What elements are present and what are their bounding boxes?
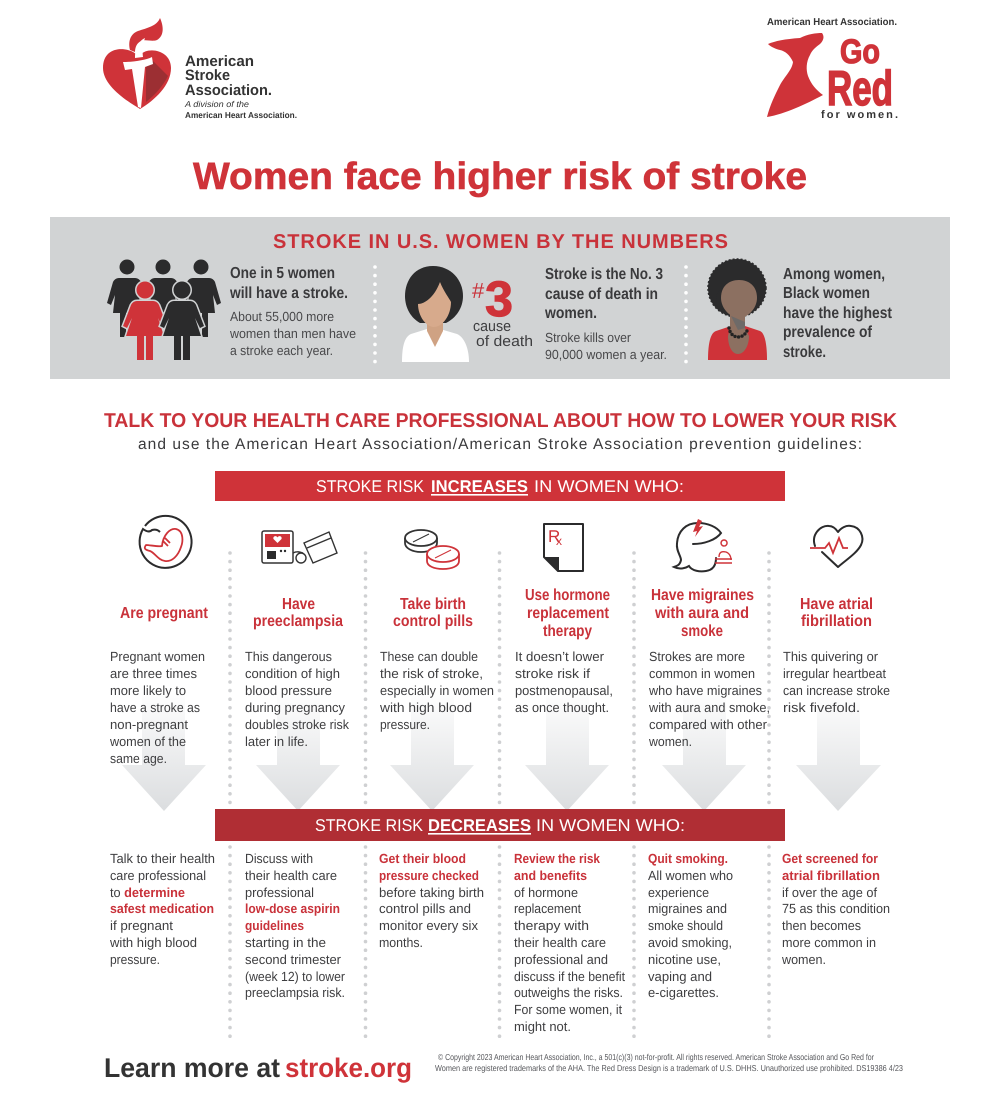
advice: migraines and smoke: migraines and <box>648 901 727 916</box>
advice: birth control pills <box>379 851 484 950</box>
advice: preeclampsia <box>245 851 346 1000</box>
stat: one in 5 women: will have a stroke. <box>229 285 348 302</box>
advice: atrial fibrillation: then becomes <box>782 918 861 933</box>
body text: as once thought. <box>515 700 609 715</box>
footer call to action: stroke.org <box>285 1053 412 1083</box>
stat: one in 5 women: One in 5 women <box>230 265 335 282</box>
body text: non-pregnant <box>110 717 188 732</box>
advice: hormone replacement therapy: For some women, it <box>514 1002 622 1017</box>
body text: It doesn’t lower <box>515 649 605 664</box>
heading <box>800 596 873 630</box>
body text <box>783 649 890 715</box>
heading <box>393 596 473 630</box>
stat: Black women prevalence: Black women <box>783 285 870 302</box>
advice: preeclampsia: Discuss with <box>245 851 313 866</box>
advice: pregnant: pressure. <box>110 952 160 967</box>
column: birth control pills <box>379 530 494 811</box>
callout: #3 cause of death: 3 <box>485 271 513 327</box>
logo: American Stroke Association: Stroke <box>185 67 230 84</box>
column: migraines and smoke <box>648 519 770 811</box>
advice: migraines and smoke: Quit smoking. <box>648 851 728 866</box>
arrow <box>525 690 609 811</box>
heading: Have migraines <box>651 587 754 604</box>
callout: #3 cause of death: # <box>472 278 485 303</box>
heading <box>525 587 610 640</box>
advice: migraines and smoke: experience <box>648 885 709 900</box>
advice: birth control pills: months. <box>379 935 423 950</box>
advice: migraines and smoke: smoke should <box>648 918 723 933</box>
advice: atrial fibrillation: Get screened for <box>782 851 878 866</box>
stat: No. 3 cause of death: Stroke kills over <box>545 330 632 345</box>
logo: Go Red for Women: Red <box>827 62 893 116</box>
advice: preeclampsia: second trimester <box>245 952 342 967</box>
heading: Are pregnant <box>120 605 209 622</box>
callout: #3 cause of death <box>472 271 533 350</box>
icon: group of women <box>107 260 221 360</box>
body text: women of the <box>109 734 186 749</box>
stat: Black women prevalence: stroke. <box>783 344 826 361</box>
banner: risk decreases: DECREASES <box>428 816 531 835</box>
heading: preeclampsia <box>253 613 343 630</box>
logo: American Stroke Association: American Heart Association. <box>185 110 297 120</box>
advice: preeclampsia: professional <box>245 885 314 900</box>
logo: Go Red for Women: for women. <box>821 109 898 121</box>
icon: pills <box>405 530 459 569</box>
section heading: TALK TO YOUR HEALTH CARE PROFESSIONAL ABOUT HOW TO LOWER YOUR RISK <box>104 410 898 432</box>
column: pregnant <box>109 516 209 811</box>
arrow <box>256 690 340 811</box>
banner: risk increases: INCREASES <box>431 477 528 496</box>
stat: one in 5 women <box>229 265 356 358</box>
panel heading: STROKE IN U.S. WOMEN BY THE NUMBERS <box>273 231 728 253</box>
banner: risk decreases <box>215 809 785 841</box>
heading <box>651 587 754 640</box>
advice: pregnant: Talk to their health <box>110 851 215 866</box>
advice: pregnant: care professional <box>110 868 206 883</box>
body text <box>379 649 494 732</box>
body text: later in life. <box>245 734 308 749</box>
icon: woman with dark hair <box>402 266 469 362</box>
body text <box>109 649 205 766</box>
body text: This quivering or <box>783 649 879 664</box>
body text: condition of high <box>245 666 340 681</box>
advice: preeclampsia: guidelines <box>245 918 304 933</box>
stat: Black women prevalence <box>783 266 893 361</box>
body text: stroke risk if <box>515 666 590 681</box>
icon: migraine head and smoking <box>674 519 732 571</box>
stat: No. 3 cause of death: Stroke is the No. 3 <box>545 266 663 283</box>
heading: Take birth <box>400 596 466 613</box>
footer call to action <box>104 1053 412 1083</box>
heading: control pills <box>393 613 473 630</box>
copyright text: Women are registered trademarks of the AHA. The Red Dress Design is a trademark of U.S. DHHS. Unauthorized use prohibited. DS19386 4/23 <box>435 1063 903 1073</box>
advice: birth control pills: Get their blood <box>379 851 466 866</box>
banner: risk decreases: STROKE RISK <box>315 816 424 835</box>
advice: preeclampsia: their health care <box>245 868 337 883</box>
icon: red dress <box>767 33 823 117</box>
column: atrial fibrillation <box>783 526 890 811</box>
body text: doubles stroke risk <box>245 717 349 732</box>
body text: pressure. <box>380 717 430 732</box>
copyright text <box>435 1052 903 1073</box>
advice: atrial fibrillation: if over the age of <box>782 885 877 900</box>
stat: No. 3 cause of death: 90,000 women a year. <box>545 347 667 362</box>
advice: atrial fibrillation <box>781 851 890 967</box>
banner: risk increases <box>215 471 785 501</box>
body text: with high blood <box>379 700 472 715</box>
advice: atrial fibrillation: atrial fibrillation <box>782 868 880 883</box>
heading: fibrillation <box>801 613 872 630</box>
advice: hormone replacement therapy: of hormone <box>514 885 578 900</box>
advice: atrial fibrillation: more common in <box>782 935 876 950</box>
body text: compared with other <box>649 717 768 732</box>
panel: stroke by the numbers <box>50 217 950 379</box>
icon: prescription page: R <box>548 527 560 546</box>
column: hormone replacement therapy <box>515 524 613 811</box>
callout: #3 cause of death: cause <box>473 318 511 335</box>
heading <box>253 596 343 630</box>
icon: blood pressure monitor <box>262 531 337 563</box>
stat: Black women prevalence: have the highest <box>783 305 893 322</box>
advice: hormone replacement therapy: therapy with <box>514 918 589 933</box>
advice: migraines and smoke <box>648 851 733 1000</box>
logo: Go Red for Women <box>767 17 898 121</box>
icon: fetus <box>140 516 192 568</box>
advice: preeclampsia: (week 12) to lower <box>245 969 346 984</box>
advice: hormone replacement therapy: replacement <box>514 901 581 916</box>
advice: hormone replacement therapy: professional and <box>514 952 608 967</box>
icon: heart with ECG line <box>810 526 862 567</box>
title: Women face higher risk of stroke <box>193 156 807 198</box>
body text: risk fivefold. <box>783 700 860 715</box>
body text: Pregnant women <box>110 649 205 664</box>
body text: common in women <box>649 666 755 681</box>
icon: prescription page: x <box>556 534 562 548</box>
arrow <box>662 690 746 811</box>
advice: pregnant: safest medication <box>110 901 214 916</box>
advice: pregnant: if pregnant <box>110 918 173 933</box>
body text: during pregnancy <box>245 700 345 715</box>
advice: migraines and smoke: vaping and <box>648 969 712 984</box>
body text: are three times <box>110 666 197 681</box>
body text: with aura and smoke, <box>648 700 770 715</box>
body text: can increase stroke <box>783 683 890 698</box>
stat: No. 3 cause of death: women. <box>544 305 597 322</box>
advice: migraines and smoke: All women who <box>648 868 733 883</box>
arrow <box>796 690 881 811</box>
advice: birth control pills: control pills and <box>379 901 471 916</box>
stat: one in 5 women: women than men have <box>229 326 356 341</box>
body text: especially in women <box>380 683 494 698</box>
banner: risk decreases: IN WOMEN WHO: <box>536 816 685 835</box>
logo: American Stroke Association: A division of the <box>184 99 249 109</box>
body text: same age. <box>110 751 167 766</box>
advice: hormone replacement therapy: Review the risk <box>514 851 601 866</box>
heading: Have atrial <box>800 596 873 613</box>
logo: Go Red for Women: American Heart Association. <box>767 17 897 28</box>
advice: migraines and smoke: avoid smoking, <box>648 935 732 950</box>
advice: hormone replacement therapy: their health care <box>514 935 606 950</box>
logo: Go Red for Women: Go <box>840 33 880 71</box>
section subheading: and use the American Heart Association/American Stroke Association prevention guidelines: <box>138 436 862 453</box>
arrow <box>390 690 474 811</box>
advice: migraines and smoke: nicotine use, <box>648 952 721 967</box>
footer call to action: Learn more at <box>104 1053 280 1083</box>
advice: migraines and smoke: e-cigarettes. <box>648 985 719 1000</box>
body text: the risk of stroke, <box>380 666 483 681</box>
heading: Have <box>282 596 315 613</box>
heading: replacement <box>527 605 610 622</box>
advice: atrial fibrillation: women. <box>781 952 826 967</box>
body text <box>245 649 349 749</box>
advice: birth control pills: pressure checked <box>379 868 479 883</box>
heading: with aura and <box>654 605 749 622</box>
icon: heart and torch <box>103 18 171 109</box>
arrow <box>122 690 206 811</box>
body text: blood pressure <box>245 683 332 698</box>
heading: Use hormone <box>525 587 610 604</box>
body text: more likely to <box>110 683 186 698</box>
body text: This dangerous <box>245 649 332 664</box>
logo: American Stroke Association: American <box>185 53 254 70</box>
advice: preeclampsia: preeclampsia risk. <box>245 985 345 1000</box>
advice: preeclampsia: starting in the <box>245 935 326 950</box>
body text <box>515 649 613 715</box>
advice: preeclampsia: low-dose aspirin <box>245 901 340 916</box>
advice: hormone replacement therapy: and benefits <box>514 868 587 883</box>
stat: one in 5 women: a stroke each year. <box>230 343 333 358</box>
advice: hormone replacement therapy: discuss if the benefit <box>514 969 625 984</box>
body text: Strokes are more <box>649 649 745 664</box>
body text: postmenopausal, <box>515 683 613 698</box>
icon: prescription page <box>544 524 583 572</box>
stat: Black women prevalence: Among women, <box>783 266 885 283</box>
advice: pregnant: with high blood <box>109 935 197 950</box>
advice: birth control pills: monitor every six <box>379 918 478 933</box>
body text: have a stroke as <box>110 700 200 715</box>
column: preeclampsia <box>245 531 349 811</box>
banner: risk increases: STROKE RISK <box>316 477 425 496</box>
banner: risk increases: IN WOMEN WHO: <box>534 477 684 496</box>
advice: hormone replacement therapy: outweighs the risks. <box>514 985 623 1000</box>
body text: These can double <box>380 649 478 664</box>
advice: pregnant: to determine <box>110 885 185 900</box>
body text: irregular heartbeat <box>783 666 886 681</box>
stat: No. 3 cause of death <box>544 266 667 362</box>
advice: hormone replacement therapy <box>514 851 625 1034</box>
copyright text: © Copyright 2023 American Heart Association, Inc., a 501(c)(3) not-for-profit. All rights reserved. American Stroke Association and Go Red for <box>438 1052 874 1062</box>
advice: birth control pills: before taking birth <box>379 885 484 900</box>
body text <box>648 649 770 749</box>
icon: Black woman <box>708 259 767 360</box>
heading: smoke <box>681 623 723 640</box>
advice: hormone replacement therapy: might not. <box>514 1019 571 1034</box>
logo: American Stroke Association <box>103 18 297 120</box>
body text: women. <box>648 734 692 749</box>
body text: who have migraines <box>648 683 762 698</box>
stat: one in 5 women: About 55,000 more <box>230 309 334 324</box>
logo: American Stroke Association: Association. <box>185 82 272 99</box>
callout: #3 cause of death: of death <box>476 333 533 350</box>
advice: pregnant <box>109 851 215 967</box>
stat: No. 3 cause of death: cause of death in <box>545 286 658 303</box>
stat: Black women prevalence: prevalence of <box>783 324 873 341</box>
heading: therapy <box>543 623 592 640</box>
advice: atrial fibrillation: 75 as this condition <box>782 901 890 916</box>
